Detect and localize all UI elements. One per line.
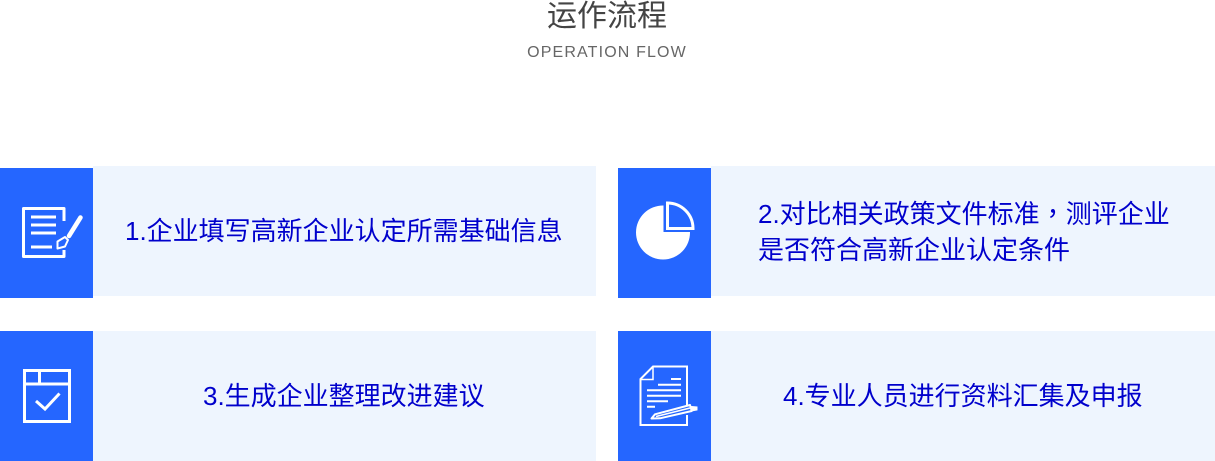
panel: step 3 bbox=[0, 331, 596, 461]
title: 运作流程 bbox=[547, 0, 667, 33]
subtitle: OPERATION FLOW bbox=[527, 44, 687, 61]
step 2 text bbox=[758, 199, 1170, 265]
step 2 icon tile bbox=[618, 168, 711, 298]
step 3 icon tile bbox=[0, 331, 93, 461]
step 3 text background bbox=[93, 331, 596, 461]
step 3 text: 3.生成企业整理改进建议 bbox=[203, 381, 485, 411]
panel: step 2 bbox=[618, 166, 1215, 298]
step 4 text background bbox=[711, 331, 1215, 461]
step 1 icon tile bbox=[0, 168, 93, 298]
panel: step 4 bbox=[618, 331, 1215, 461]
step 4 icon tile bbox=[618, 331, 711, 461]
icon: calendar check bbox=[23, 369, 71, 423]
icon: document and pen bbox=[640, 366, 698, 426]
icon: document and fountain pen bbox=[22, 207, 83, 258]
step 2 text: 是否符合高新企业认定条件 bbox=[758, 235, 1070, 265]
step 2 text background bbox=[711, 166, 1215, 296]
icon: pie chart bbox=[636, 202, 694, 260]
step 4 text: 4.专业人员进行资料汇集及申报 bbox=[783, 381, 1143, 411]
step 2 text: 2.对比相关政策文件标准，测评企业 bbox=[758, 199, 1170, 229]
step 1 text background bbox=[93, 166, 596, 296]
step 1 text: 1.企业填写高新企业认定所需基础信息 bbox=[125, 216, 563, 246]
panel: step 1 bbox=[0, 166, 596, 298]
